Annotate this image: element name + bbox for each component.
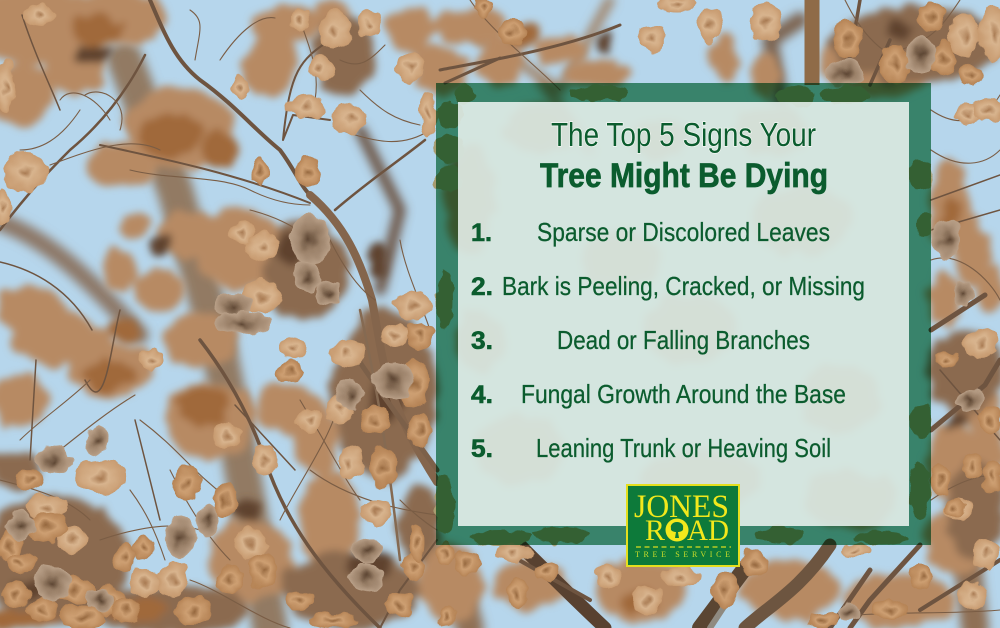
list item 3: Dead or Falling Branches <box>557 325 810 355</box>
list item 3: 3. <box>471 327 493 355</box>
list item 1: 1. <box>471 219 492 247</box>
list item 3 <box>471 325 810 355</box>
list item 1: Sparse or Discolored Leaves <box>537 217 830 247</box>
list item 4: 4. <box>471 381 493 409</box>
logo: Jones Road Tree Service: R <box>645 514 665 547</box>
title: The Top 5 Signs Your <box>551 116 816 153</box>
logo: Jones Road Tree Service: JONES <box>634 489 729 525</box>
logo: Jones Road Tree Service <box>626 484 740 567</box>
list item 2: 2. <box>471 273 493 301</box>
pale translucent content panel <box>458 102 909 526</box>
logo: Jones Road Tree Service: TREE SERVICE <box>635 550 730 559</box>
title <box>540 116 828 195</box>
logo: Jones Road Tree Service: AD <box>687 514 729 547</box>
title: Tree Might Be Dying <box>540 157 828 195</box>
green translucent frame <box>436 83 931 545</box>
list item 2: Bark is Peeling, Cracked, or Missing <box>502 271 865 301</box>
list item 4: Fungal Growth Around the Base <box>521 379 846 409</box>
list item 5: Leaning Trunk or Heaving Soil <box>536 433 831 463</box>
list item 5: 5. <box>471 435 493 463</box>
